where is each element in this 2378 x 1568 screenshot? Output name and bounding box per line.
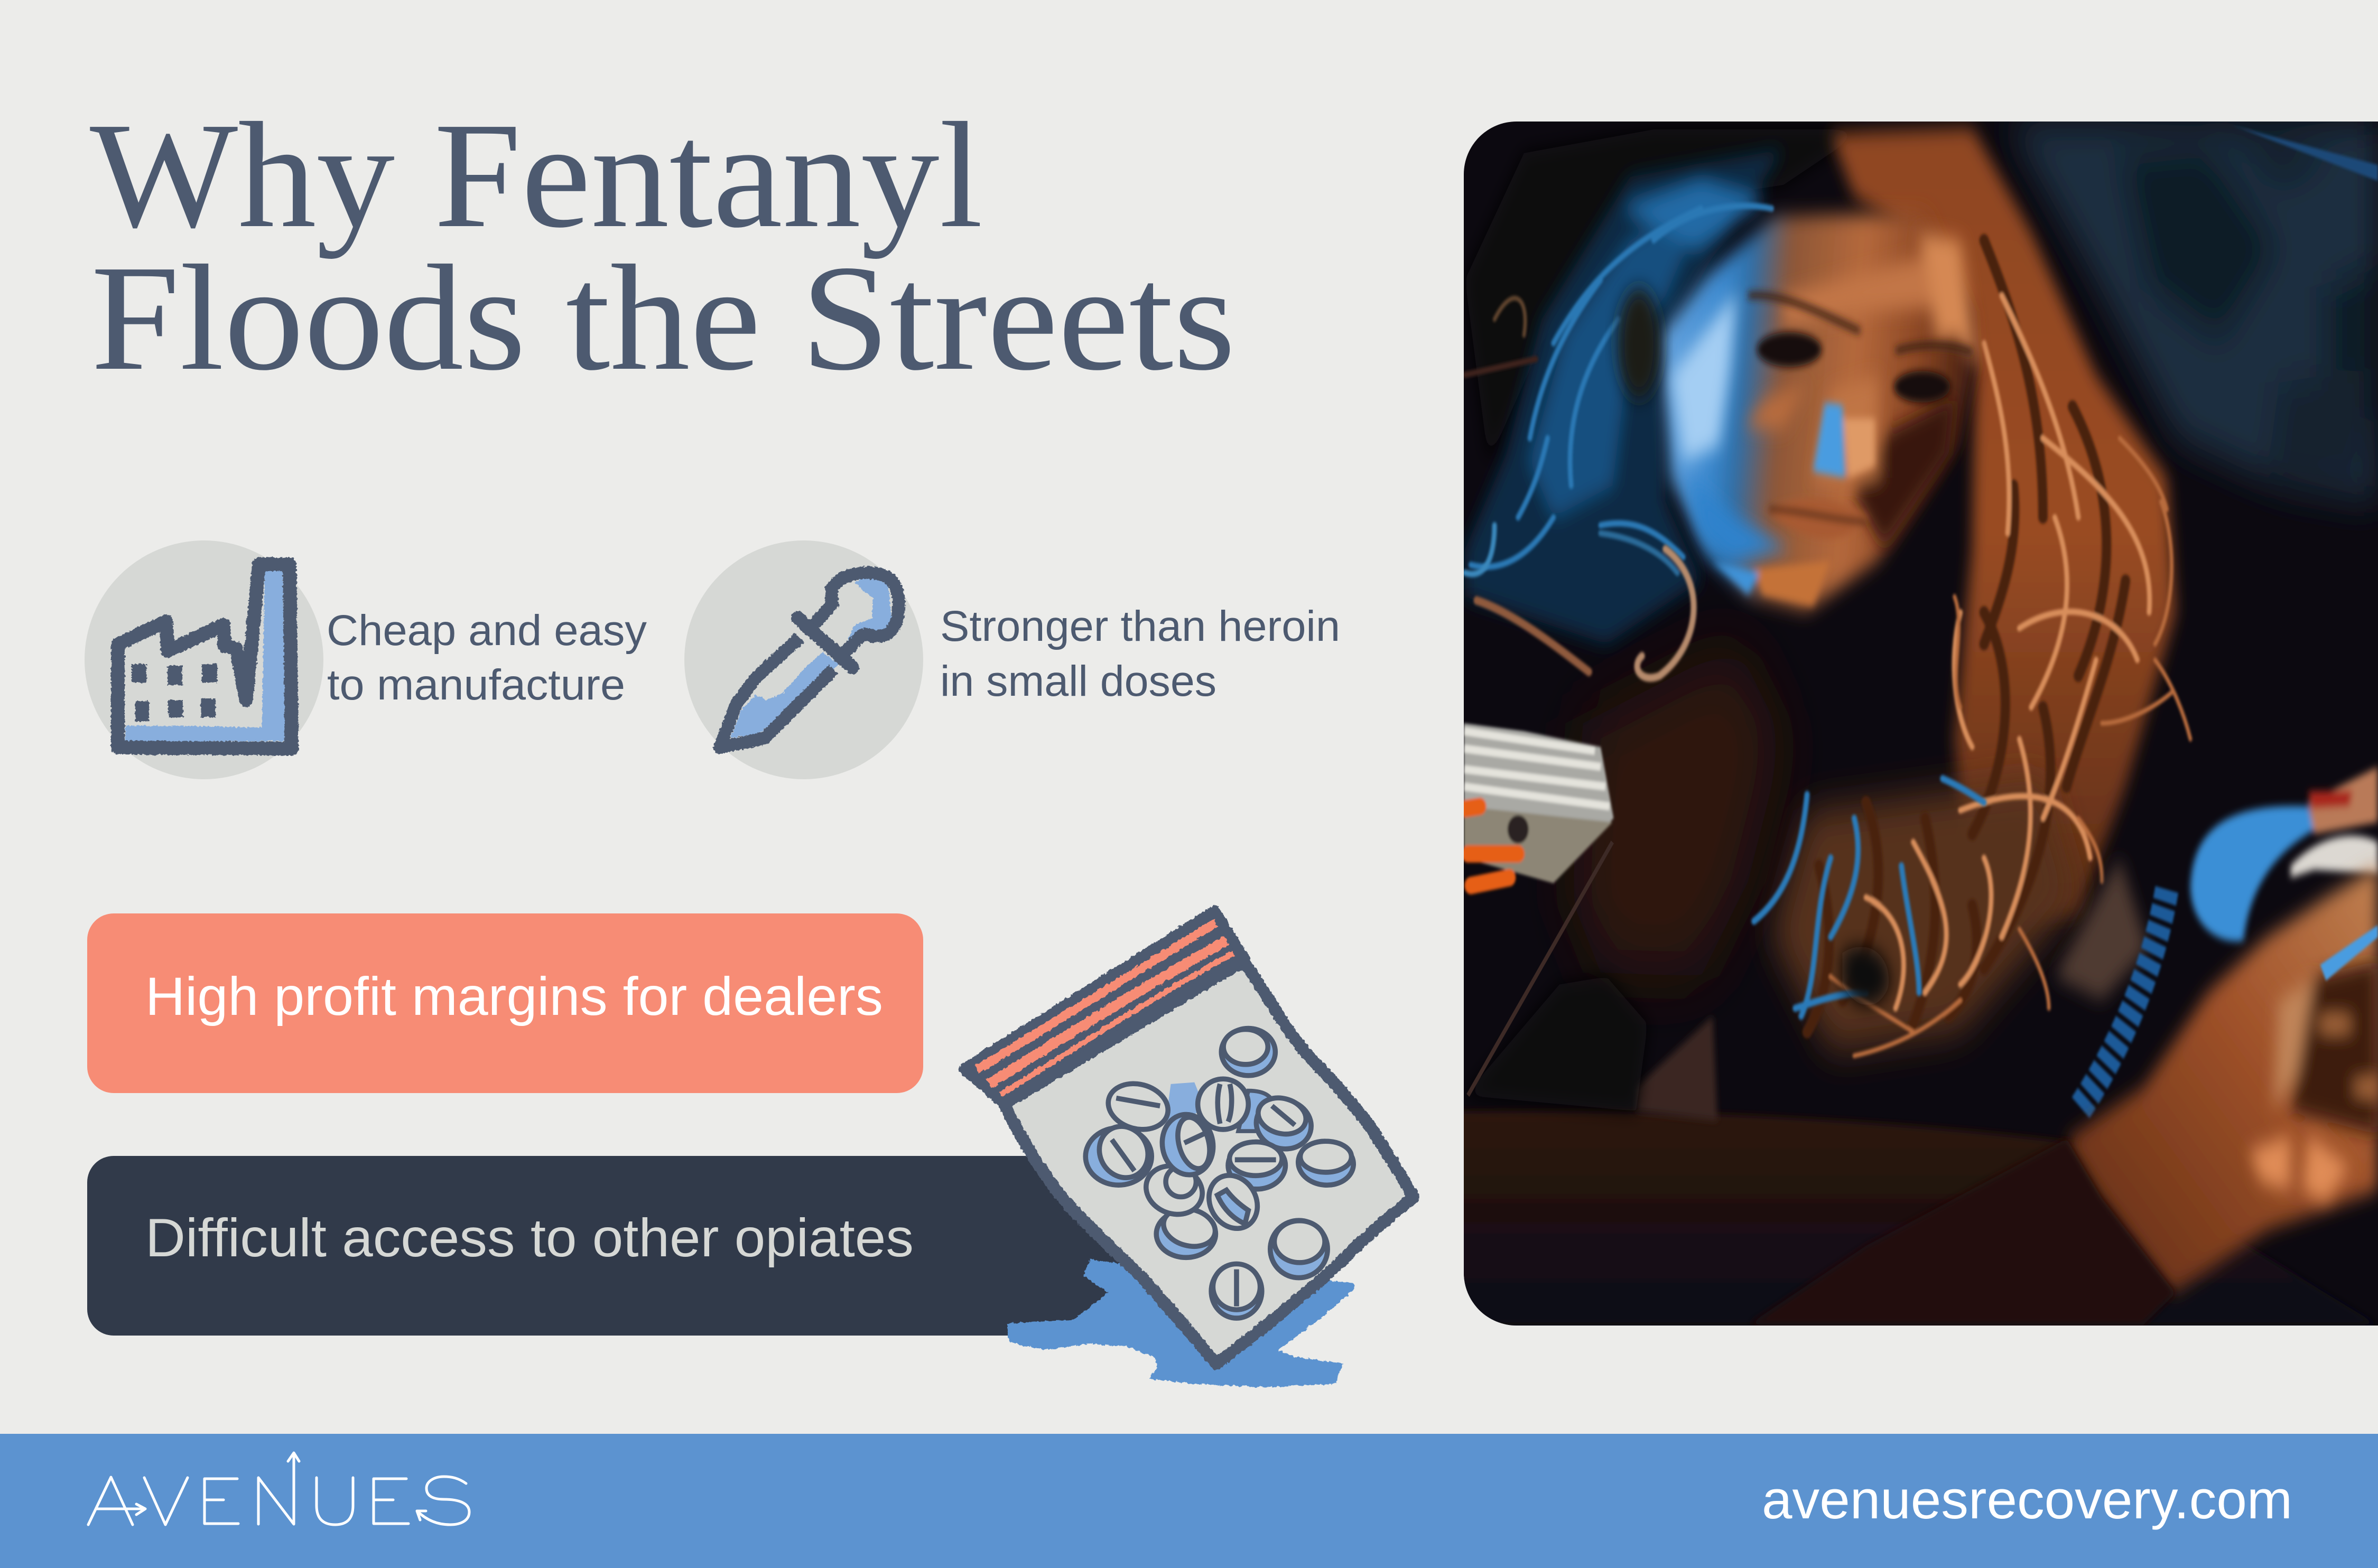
title: Floods the Streets [91,234,1236,402]
face [1661,212,1975,611]
pill [1156,1203,1220,1257]
pill [1157,1110,1218,1179]
icon: dropper [684,540,923,779]
pill [1085,1117,1157,1187]
ledge [1453,1110,2378,1325]
text: stronger than heroin: Stronger than heroin [940,602,1340,650]
lower hair blue strands [1754,779,1984,1016]
title: Why Fentanyl [90,91,983,259]
panel: high profit margins [87,913,923,1093]
pill [1103,1077,1173,1136]
foreground hand [2067,866,2378,1293]
icon: bag of pills [963,910,1414,1387]
pill [1270,1220,1327,1278]
text: cheap and easy: to manufacture [327,661,625,709]
pill [1221,1029,1275,1076]
hair blue [1465,149,1784,644]
title [90,91,1236,402]
text: cheap and easy: Cheap and easy [327,606,647,655]
logo: Avenues [88,1453,469,1525]
panel: high profit margins: High profit margins for dealers [145,966,883,1026]
pill [1251,1093,1317,1155]
sleeve [1748,1139,2176,1325]
photo: woman handing over pills in a car at night [1453,106,2378,1373]
hair right [1831,128,2176,929]
pill [1200,1166,1267,1237]
icon: factory [85,540,323,779]
pill [1228,1142,1285,1189]
jacket [1465,977,1648,1111]
curls [1465,298,1694,678]
chest [1571,644,1784,977]
text: cheap and easy [327,606,647,709]
pill [1139,1158,1209,1222]
text: stronger than heroin: in small doses [940,657,1216,705]
money [1464,723,1614,885]
panel: difficult access [87,1156,1123,1336]
website url: avenuesrecovery.com [1762,1469,2292,1530]
ear [1618,288,1660,399]
footer bar [0,1434,2378,1568]
pill [1296,1139,1355,1188]
window background [2008,122,2378,501]
pill [1211,1264,1262,1318]
panel: difficult access: Difficult access to other opiates [145,1208,914,1268]
text: stronger than heroin [940,602,1340,705]
blue hand [2190,767,2378,941]
pill [1198,1079,1248,1130]
left dark hair top [1465,129,1866,462]
